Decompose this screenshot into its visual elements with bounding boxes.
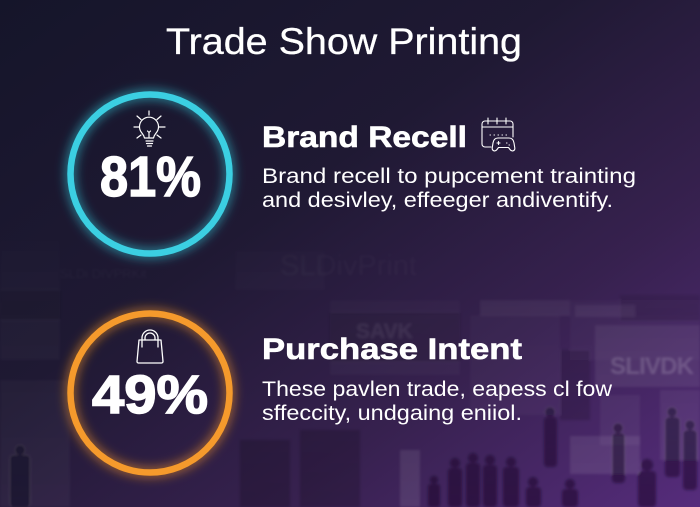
heading: Brand Recell (262, 121, 467, 154)
crowd silhouettes (10, 407, 697, 507)
booth signage: SLDi DIVPRKit (60, 266, 147, 281)
stat value: 81% (100, 145, 201, 209)
heading: Purchase Intent (262, 333, 522, 366)
title: Trade Show Printing (166, 21, 522, 62)
icon: lightbulb (134, 111, 165, 146)
description: Brand recell to pupcement trainting (262, 164, 636, 188)
booth signage (358, 324, 694, 375)
text block: purchase intent: sffeccity, undgaing eniiol. (262, 402, 522, 425)
booth signage: SAVK (356, 320, 413, 343)
stat ring: 81% (70, 94, 230, 254)
text block: brand recell (262, 118, 636, 212)
icon: shopping bag (137, 330, 163, 363)
booth signage: SLDivPrint (280, 250, 417, 282)
trade show floor photo (7, 298, 700, 507)
description: These pavlen trade, eapess cl fow (262, 378, 613, 401)
stat ring: 49% (70, 314, 230, 472)
text block: brand recell: and desivley, effeeger andiventify. (262, 188, 613, 212)
stat value: 49% (92, 365, 208, 425)
booth signage: SLIVDK (610, 353, 695, 380)
text block: purchase intent (262, 333, 613, 425)
icon: calendar with game controller (482, 118, 515, 151)
